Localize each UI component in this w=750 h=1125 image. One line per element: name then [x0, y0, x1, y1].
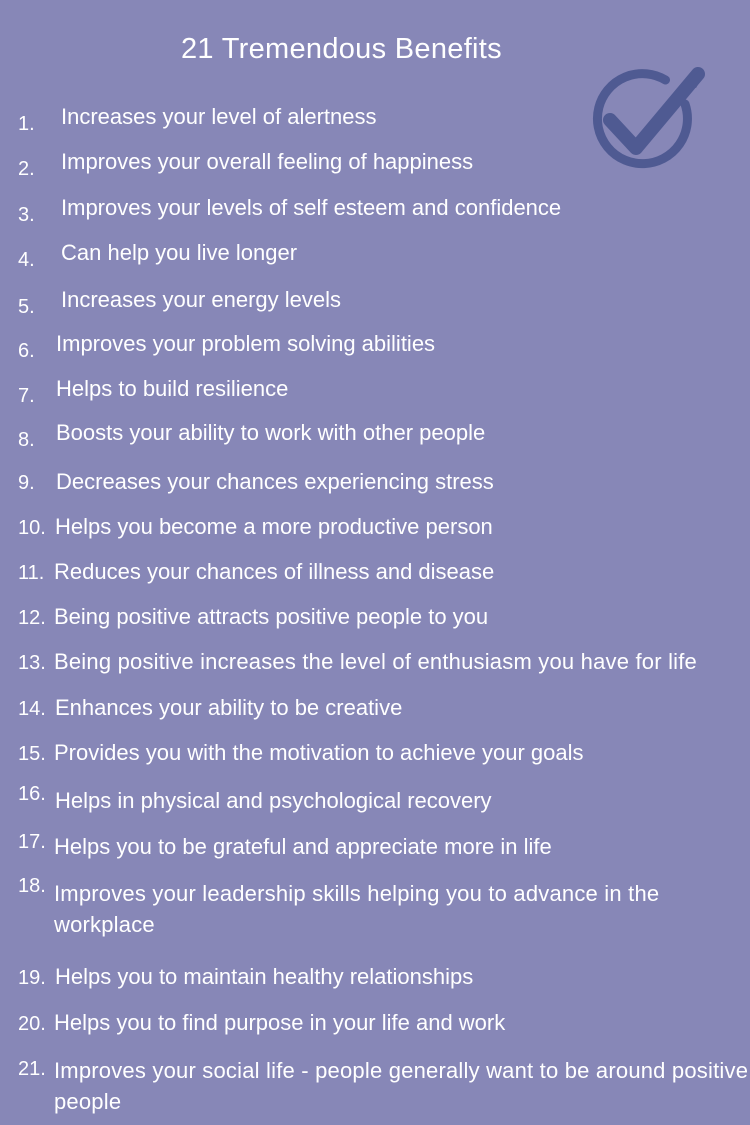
item 7: Helps to build resilience — [56, 376, 288, 401]
item 19: 19. — [18, 967, 46, 989]
item 12: 12. — [18, 607, 46, 629]
item 3: Improves your levels of self esteem and confidence — [61, 195, 561, 220]
item 8: Boosts your ability to work with other people — [56, 420, 485, 445]
item 4: 4. — [18, 249, 35, 271]
item 17: Helps you to be grateful and appreciate more in life — [54, 834, 552, 859]
item 7: 7. — [18, 385, 35, 407]
item 16: 16. — [18, 783, 46, 805]
item 21: people — [54, 1089, 121, 1114]
item 20: Helps you to find purpose in your life and work — [54, 1010, 505, 1035]
item 3: 3. — [18, 204, 35, 226]
item 21: Improves your social life - people generally want to be around positive — [54, 1058, 748, 1083]
item 15: 15. — [18, 743, 46, 765]
item 5 — [18, 287, 341, 318]
item 11: Reduces your chances of illness and disease — [54, 559, 494, 584]
item 1: Increases your level of alertness — [61, 104, 376, 129]
item 21: 21. — [18, 1058, 46, 1080]
item 21 — [18, 1058, 748, 1114]
item 12: Being positive attracts positive people to you — [54, 604, 488, 629]
item 6: Improves your problem solving abilities — [56, 331, 435, 356]
item 17: 17. — [18, 831, 46, 853]
item 15: Provides you with the motivation to achieve your goals — [54, 740, 584, 765]
item 13: Being positive increases the level of enthusiasm you have for life — [54, 649, 697, 674]
icon: check circle — [593, 67, 705, 168]
item 19: Helps you to maintain healthy relationships — [55, 964, 473, 989]
item 14: 14. — [18, 698, 46, 720]
item 9: 9. — [18, 472, 35, 494]
item 18 — [18, 875, 659, 937]
item 11: 11. — [18, 562, 44, 584]
item 16: Helps in physical and psychological recovery — [55, 788, 492, 813]
item 13: 13. — [18, 652, 46, 674]
item 2: Improves your overall feeling of happiness — [61, 149, 473, 174]
item 14: Enhances your ability to be creative — [55, 695, 402, 720]
title: 21 Tremendous Benefits — [181, 33, 502, 65]
item 18: 18. — [18, 875, 46, 897]
item 18: Improves your leadership skills helping you to advance in the — [54, 881, 659, 906]
item 6: 6. — [18, 340, 35, 362]
item 20: 20. — [18, 1013, 46, 1035]
item 5: Increases your energy levels — [61, 287, 341, 312]
item 2: 2. — [18, 158, 35, 180]
item 7 — [18, 376, 288, 407]
item 4: Can help you live longer — [61, 240, 297, 265]
item 5: 5. — [18, 296, 35, 318]
item 9: Decreases your chances experiencing stress — [56, 469, 494, 494]
item 4 — [18, 240, 297, 271]
item 10: 10. — [18, 517, 46, 539]
item 18: workplace — [54, 912, 155, 937]
item 8: 8. — [18, 429, 35, 451]
item 10: Helps you become a more productive person — [55, 514, 493, 539]
item 1: 1. — [18, 113, 35, 135]
